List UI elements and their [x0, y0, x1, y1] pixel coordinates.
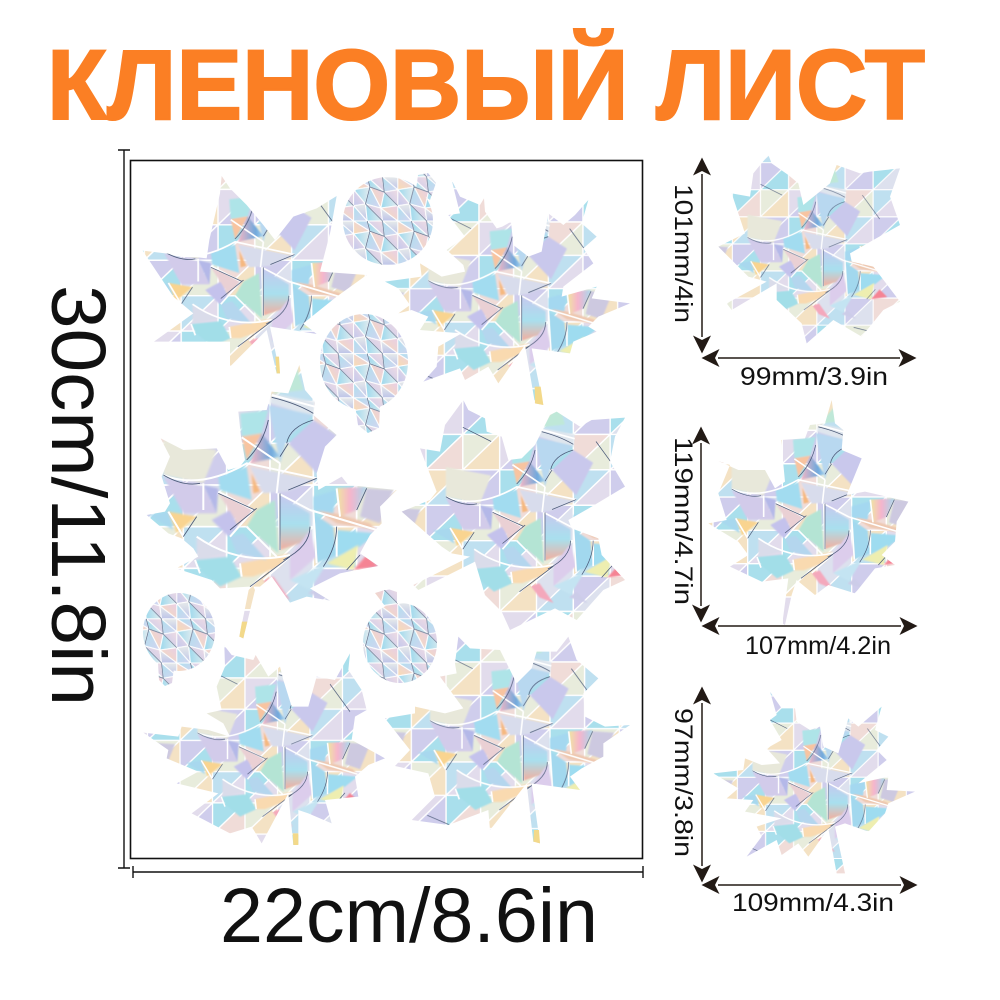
height label: 97mm/3.8in	[669, 708, 697, 857]
leaf 1	[143, 176, 367, 373]
width label: 109mm/4.3in	[732, 889, 894, 917]
acorn 3	[143, 593, 215, 686]
acorn 1	[343, 173, 436, 265]
panel: leaf size 1	[669, 155, 900, 391]
dimension: sheet width	[133, 866, 643, 878]
dimension: sheet height	[118, 150, 130, 868]
leaf 6	[385, 637, 630, 843]
acorn 2	[320, 314, 408, 433]
width arrow	[718, 625, 901, 627]
width label: 107mm/4.2in	[745, 632, 891, 660]
width arrow	[718, 357, 900, 359]
label: sheet width: 22cm/8.6in	[220, 873, 598, 959]
height arrow	[701, 703, 703, 866]
leaf 5	[143, 646, 385, 845]
width arrow	[718, 884, 901, 886]
panel: sticker sheet	[130, 160, 642, 858]
height label: 101mm/4in	[669, 184, 697, 323]
sheet frame	[130, 160, 642, 858]
height label: 119mm/4.7in	[669, 437, 697, 605]
leaf	[713, 692, 915, 873]
panel: leaf size 2	[669, 400, 908, 660]
leaf 3	[147, 365, 397, 638]
leaf	[718, 155, 900, 343]
width label: 99mm/3.9in	[740, 363, 888, 391]
height arrow	[700, 443, 702, 606]
leaf 2	[385, 180, 630, 405]
leaf	[708, 400, 908, 625]
acorn 4	[363, 589, 437, 683]
label: sheet height: 30cm/11.8in	[35, 285, 121, 706]
title: КЛЕНОВЫЙ ЛИСТ	[47, 29, 925, 140]
leaf 4	[402, 400, 625, 630]
panel: leaf size 3	[669, 692, 915, 917]
height arrow	[701, 174, 703, 337]
